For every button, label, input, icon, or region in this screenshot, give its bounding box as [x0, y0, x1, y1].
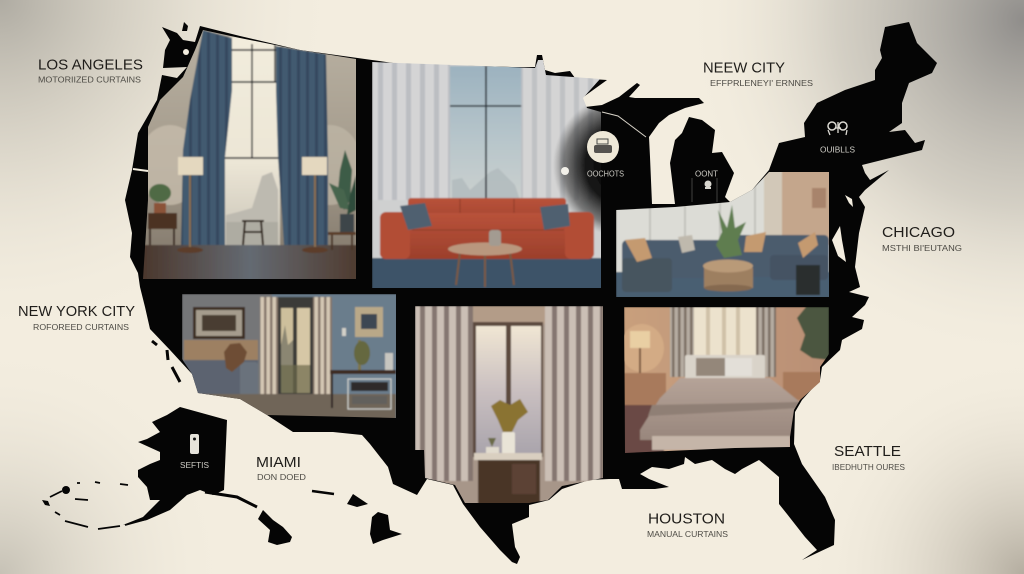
picture right	[355, 307, 383, 337]
panel: window with striped curtains	[415, 306, 605, 506]
panel: room with dog	[182, 294, 397, 420]
callout: Alaska door-hanger icon	[180, 434, 209, 470]
label: Seattle	[832, 443, 905, 472]
bed	[640, 378, 800, 450]
label: Houston	[647, 510, 728, 539]
lamps	[177, 157, 328, 253]
window mullions	[450, 66, 522, 200]
label: Miami	[256, 454, 306, 482]
label: New City: NEEW CITY	[703, 60, 785, 76]
label: New City: EFFPRLENEYI' ERNNES	[710, 78, 813, 88]
label: New York City: NEW YORK CITY	[18, 303, 135, 320]
headboard and pillows	[685, 355, 765, 381]
side table and plant left	[148, 184, 177, 245]
window view	[278, 297, 313, 397]
carpet	[624, 405, 664, 455]
picture left	[193, 307, 245, 339]
coffee table	[448, 230, 522, 287]
sofa	[380, 198, 594, 259]
label: Chicago: CHICAGO	[882, 224, 955, 241]
console	[330, 370, 396, 409]
callout: Michigan label: OONT	[695, 170, 718, 178]
lamp	[620, 324, 664, 373]
dark vignette	[554, 106, 601, 232]
nightstands	[624, 372, 823, 407]
curtains	[415, 306, 473, 481]
label: Chicago	[882, 224, 962, 253]
label: New York City	[18, 303, 135, 332]
callout: northeast icon	[820, 122, 855, 154]
plant and frames	[342, 328, 393, 370]
label: Los Angeles: MOTORIIZED CURTAINS	[38, 74, 141, 84]
floor rug	[372, 258, 604, 290]
plant	[797, 307, 829, 360]
plant right	[328, 150, 356, 250]
sofa and glow	[184, 340, 258, 396]
plant and vase	[486, 399, 528, 455]
callout: cream icon circle: OOCHOTS	[587, 170, 624, 178]
callout: Alaska door-hanger icon: SEFTIS	[180, 461, 209, 470]
floor	[207, 393, 396, 418]
label: Seattle: IBEDHUTH OURES	[832, 462, 905, 472]
coffee table	[703, 260, 753, 292]
cushions	[625, 232, 818, 262]
label: Houston: MANUAL CURTAINS	[647, 529, 728, 539]
curtain right	[276, 46, 328, 245]
panel: bedroom	[620, 307, 829, 457]
curtain left	[181, 30, 232, 245]
label: Miami: MIAMI	[256, 454, 301, 471]
callout: northeast icon: OUIBLLS	[820, 146, 855, 154]
skyline	[452, 168, 520, 200]
window mullions	[225, 40, 281, 158]
label: Los Angeles	[38, 56, 143, 84]
floor	[140, 245, 360, 281]
sofa	[622, 235, 829, 292]
plant	[716, 205, 746, 258]
panel: living room with blue curtains	[138, 25, 362, 281]
map: Hawaii	[312, 491, 402, 544]
panel: living room with red sofa	[372, 60, 601, 288]
floor rug	[616, 272, 831, 298]
pillows	[400, 203, 432, 230]
label: Chicago: MSTHI BI'EUTANG	[882, 243, 962, 253]
city skyline	[226, 172, 278, 222]
label: Miami: DON DOED	[257, 472, 306, 482]
label: Houston: HOUSTON	[648, 510, 725, 528]
pelmet	[472, 306, 545, 324]
label: Los Angeles: LOS ANGELES	[38, 56, 143, 74]
map: Alaska	[42, 407, 292, 545]
curtains	[378, 62, 450, 200]
map silhouette: contiguous USA	[125, 22, 937, 564]
label: New City	[703, 60, 813, 88]
label: New York City: ROFOREED CURTAINS	[33, 322, 129, 332]
callout: Michigan label	[692, 170, 718, 202]
callout: cream icon circle	[561, 131, 624, 178]
cabinet	[474, 453, 542, 506]
curtains	[260, 297, 278, 397]
stool	[242, 221, 264, 245]
curtains	[670, 307, 776, 377]
dog	[224, 343, 247, 372]
label: Seattle: SEATTLE	[834, 443, 901, 460]
window view	[473, 322, 543, 457]
dark stand	[796, 265, 820, 295]
panel: blue sectional room	[616, 170, 831, 298]
